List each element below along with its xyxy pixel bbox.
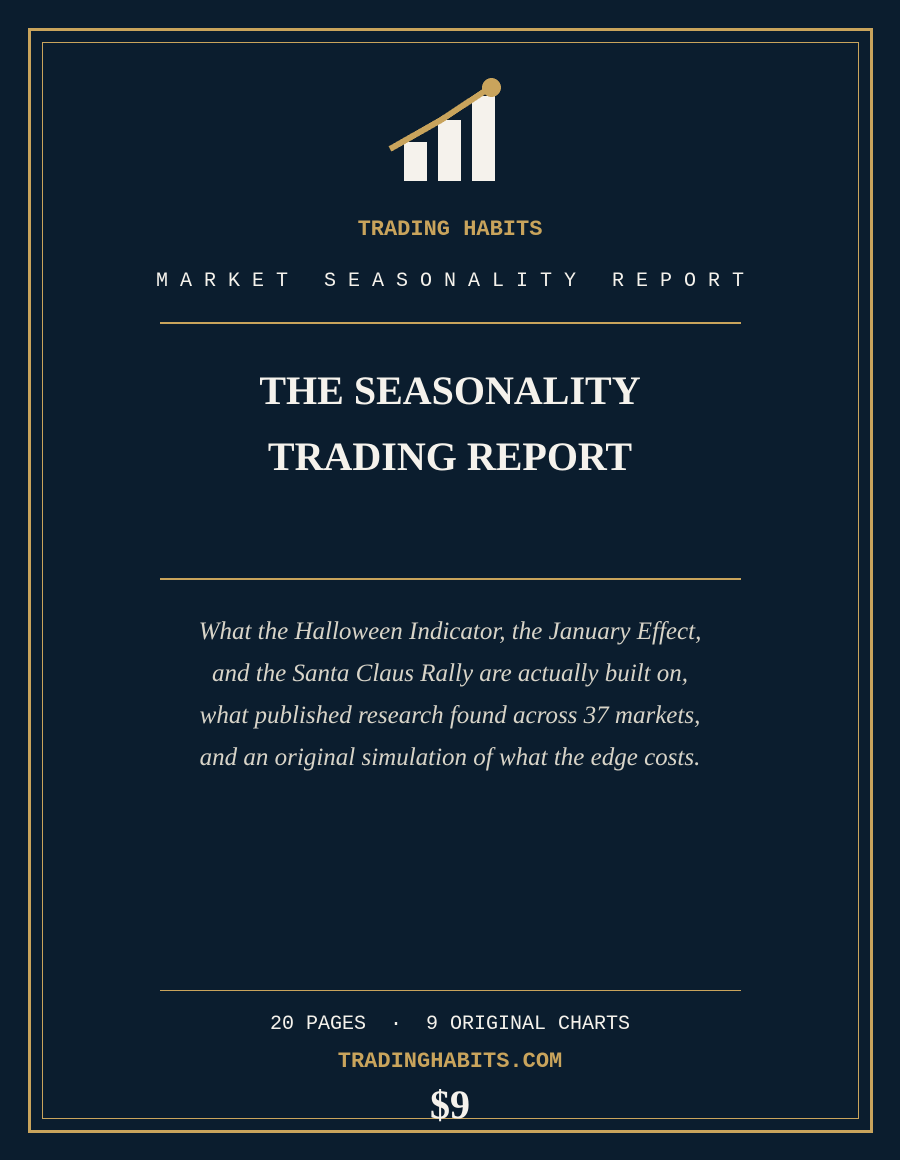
main title: THE SEASONALITY TRADING REPORT bbox=[259, 368, 641, 479]
report stats: 20 PAGES · 9 ORIGINAL CHARTS bbox=[270, 1013, 630, 1036]
website: TRADINGHABITS.COM bbox=[338, 1049, 562, 1074]
top divider bbox=[160, 322, 741, 324]
price: $9 bbox=[430, 1082, 470, 1127]
icon: rising bar chart logo bbox=[388, 78, 501, 181]
bottom divider bbox=[160, 990, 741, 991]
brand name: TRADING HABITS bbox=[358, 217, 542, 242]
middle divider bbox=[160, 578, 741, 580]
description: What the Halloween Indicator, the January Effect, and the Santa Claus Rally are actually built on, what published research found across 37 markets, and an original simulation of what the edge costs. bbox=[199, 618, 701, 771]
subtitle: MARKET SEASONALITY REPORT bbox=[156, 270, 756, 293]
